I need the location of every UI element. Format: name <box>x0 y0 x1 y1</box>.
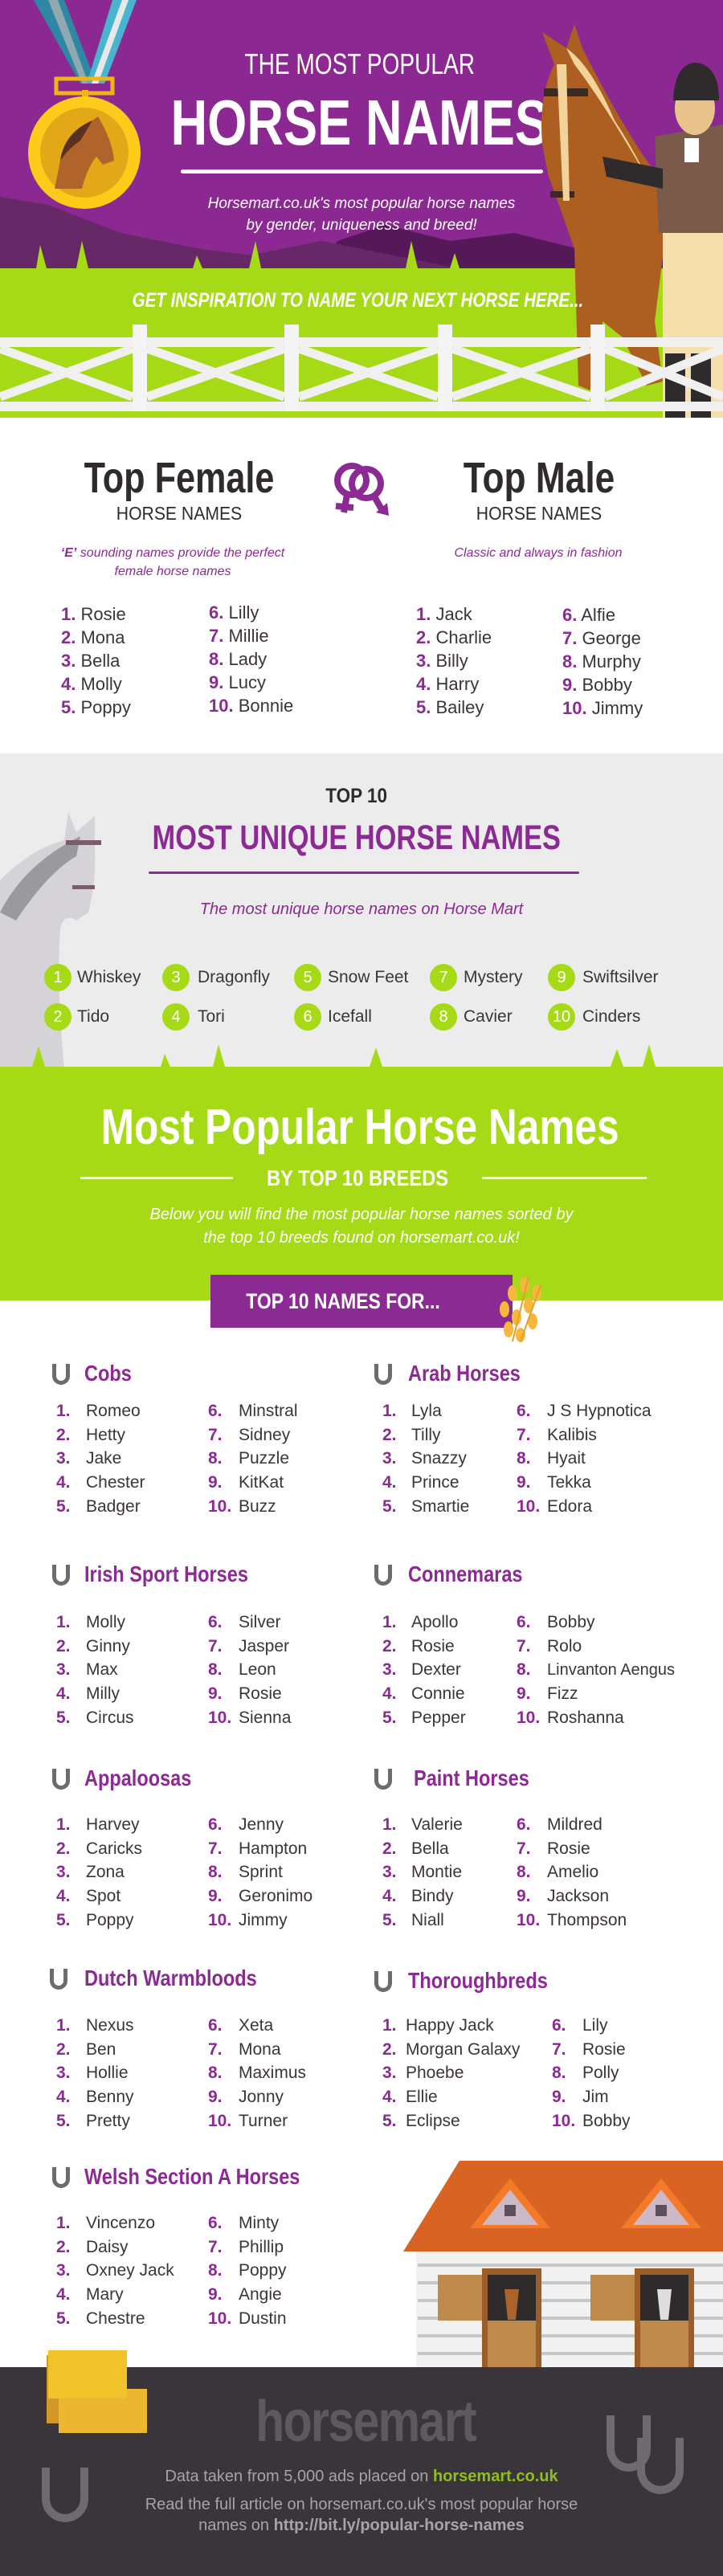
breed: appaloosas: Poppy <box>86 1911 134 1929</box>
footer panel: horsemart <box>255 2390 476 2454</box>
breed: irish sport horses: Circus <box>86 1708 134 1727</box>
breed: dutch warmbloods: Mona <box>239 2040 281 2059</box>
list: unique names: Cavier <box>464 1007 513 1026</box>
breed: irish sport horses: Sienna <box>239 1708 291 1727</box>
title <box>171 47 549 158</box>
list: female names: 5. Poppy <box>61 697 131 717</box>
subheading: by top 10 breeds: BY TOP 10 BREEDS <box>267 1166 448 1190</box>
list: unique names: 8 <box>439 1008 448 1026</box>
title: THE MOST POPULAR <box>245 47 475 80</box>
breed: welsh section a horses: 7. <box>208 2238 223 2256</box>
list: unique names: 5 <box>303 969 312 986</box>
breed: dutch warmbloods: 6. <box>208 2016 223 2035</box>
breed: dutch warmbloods: Ben <box>86 2040 116 2059</box>
list: unique names: 7 <box>439 969 448 986</box>
list: female names: 1. Rosie <box>61 604 126 624</box>
breed: dutch warmbloods: 5. <box>56 2112 71 2130</box>
breed: irish sport horses: 4. <box>56 1684 71 1703</box>
list: female names: 2. Mona <box>61 627 125 647</box>
list: female names: 4. Molly <box>61 674 122 694</box>
breed: irish sport horses: 3. <box>56 1660 71 1679</box>
breed: thoroughbreds: Lily <box>582 2016 608 2035</box>
breed: cobs: Cobs <box>84 1361 132 1386</box>
list: male names: 7. George <box>562 628 641 648</box>
breed: welsh section a horses: 9. <box>208 2285 223 2304</box>
list: male names: 2. Charlie <box>416 627 492 647</box>
list: unique names: Cinders <box>582 1007 640 1026</box>
breed: cobs: 4. <box>56 1473 71 1492</box>
breed: welsh section a horses: 8. <box>208 2261 223 2280</box>
breed: dutch warmbloods: 9. <box>208 2088 223 2106</box>
breed: dutch warmbloods: Turner <box>239 2112 288 2130</box>
list: unique names: Icefall <box>328 1007 372 1026</box>
breed: thoroughbreds: Ellie <box>406 2088 438 2106</box>
breed: paint horses: Jackson <box>547 1887 609 1905</box>
breed: appaloosas: 5. <box>56 1911 71 1929</box>
banner: top 10 names for: TOP 10 NAMES FOR... <box>247 1289 440 1313</box>
list: unique names <box>44 964 659 1031</box>
breed: welsh section a horses: Welsh Section A Horses <box>84 2164 300 2189</box>
icon: wheat <box>500 1277 541 1342</box>
breed: thoroughbreds: Eclipse <box>406 2112 460 2130</box>
list: female names: 9. Lucy <box>209 672 266 692</box>
illustration: horse and rider <box>541 24 723 418</box>
breed: appaloosas: 10. <box>208 1911 231 1929</box>
list: male names: 10. Jimmy <box>562 698 643 718</box>
breed: connemaras: 6. <box>517 1613 531 1631</box>
heading: most popular horse names: Most Popular Horse Names <box>101 1100 619 1155</box>
breed: appaloosas: 7. <box>208 1839 223 1858</box>
breed: irish sport horses: Irish Sport Horses <box>84 1562 248 1586</box>
breed: thoroughbreds: 1. <box>382 2016 397 2035</box>
breed: thoroughbreds: Happy Jack <box>406 2016 494 2035</box>
breed: arab horses: 9. <box>517 1473 531 1492</box>
breed: connemaras: Rosie <box>411 1637 455 1655</box>
breed: connemaras: 8. <box>517 1660 531 1679</box>
breed: cobs: 7. <box>208 1426 223 1444</box>
list: female names: 6. Lilly <box>209 602 259 623</box>
breed: cobs: Minstral <box>239 1402 298 1420</box>
breed: welsh section a horses: Poppy <box>239 2261 287 2280</box>
breed: connemaras: Pepper <box>411 1708 466 1727</box>
breed: irish sport horses: Molly <box>86 1613 125 1631</box>
breed: thoroughbreds: Thoroughbreds <box>408 1968 548 1993</box>
breed: thoroughbreds: Rosie <box>582 2040 626 2059</box>
breed: appaloosas: Jimmy <box>239 1911 288 1929</box>
breed: dutch warmbloods: Nexus <box>86 2016 134 2035</box>
breed: connemaras: 10. <box>517 1708 540 1727</box>
breed: arab horses: 4. <box>382 1473 397 1492</box>
breed: paint horses: Bella <box>411 1839 449 1858</box>
breed: appaloosas: 3. <box>56 1863 71 1881</box>
breed: dutch warmbloods: 1. <box>56 2016 71 2035</box>
female subtitle: female horse names <box>115 565 231 578</box>
subtitle: by gender, uniqueness and breed! <box>246 217 477 234</box>
breed: thoroughbreds <box>374 1968 631 2130</box>
breeds description <box>150 1206 574 1247</box>
heading: top male <box>464 454 615 524</box>
list: female names: 7. Millie <box>209 626 269 646</box>
breed: arab horses: 6. <box>517 1402 531 1420</box>
breed: welsh section a horses <box>52 2164 300 2328</box>
breed: connemaras: 5. <box>382 1708 397 1727</box>
female subtitle: ‘E’ sounding names provide the perfect <box>61 546 284 560</box>
unique subtitle: The most unique horse names on Horse Mart <box>200 900 523 918</box>
breed: paint horses <box>374 1766 627 1929</box>
heading: top 10 unique: MOST UNIQUE HORSE NAMES <box>153 819 561 857</box>
breed: appaloosas <box>52 1766 312 1929</box>
breed: welsh section a horses: 5. <box>56 2309 71 2328</box>
breed: arab horses: 7. <box>517 1426 531 1444</box>
breed: welsh section a horses: 6. <box>208 2214 223 2232</box>
breed: irish sport horses: Ginny <box>86 1637 130 1655</box>
heading: top female: HORSE NAMES <box>116 503 242 524</box>
breed: arab horses: Smartie <box>411 1497 469 1516</box>
subtitle: Horsemart.co.uk's most popular horse names <box>208 195 515 212</box>
breed: thoroughbreds: 6. <box>552 2016 566 2035</box>
breed: irish sport horses: Max <box>86 1660 118 1679</box>
breed: dutch warmbloods: 10. <box>208 2112 231 2130</box>
breed: welsh section a horses: 3. <box>56 2261 71 2280</box>
breed: thoroughbreds: Polly <box>582 2064 619 2082</box>
breed: welsh section a horses: Minty <box>239 2214 279 2232</box>
list: male names: 1. Jack <box>416 604 472 624</box>
breeds description: the top 10 breeds found on horsemart.co.uk! <box>203 1229 520 1247</box>
breed: arab horses: 3. <box>382 1449 397 1468</box>
breed: welsh section a horses: Oxney Jack <box>86 2261 174 2280</box>
list: unique names: Tido <box>77 1007 109 1026</box>
title: HORSE NAMES <box>171 87 549 158</box>
breed: arab horses <box>374 1361 652 1516</box>
fence <box>0 325 723 411</box>
list: unique names: 1 <box>53 969 63 986</box>
panel: breeds intro <box>0 1067 723 1300</box>
list: female names: 3. Bella <box>61 651 120 671</box>
breed: arab horses: Lyla <box>411 1402 442 1420</box>
breed: welsh section a horses: Phillip <box>239 2238 284 2256</box>
breed: appaloosas: 2. <box>56 1839 71 1858</box>
breed: cobs: Badger <box>86 1497 141 1516</box>
breed: welsh section a horses: Vincenzo <box>86 2214 155 2232</box>
subtitle <box>208 195 515 234</box>
breed: irish sport horses: 8. <box>208 1660 223 1679</box>
list: male names: 6. Alfie <box>562 605 615 625</box>
breed: cobs: Jake <box>86 1449 121 1468</box>
breed: paint horses: Montie <box>411 1863 462 1881</box>
breed: connemaras: 1. <box>382 1613 397 1631</box>
breed: thoroughbreds: Bobby <box>582 2112 631 2130</box>
list: unique names: 2 <box>53 1008 63 1026</box>
breed: connemaras: 2. <box>382 1637 397 1655</box>
breed: thoroughbreds: 7. <box>552 2040 566 2059</box>
breed: welsh section a horses: Dustin <box>239 2309 287 2328</box>
list: unique names: Mystery <box>464 968 522 986</box>
breed: connemaras: 7. <box>517 1637 531 1655</box>
breed: dutch warmbloods: Maximus <box>239 2064 306 2082</box>
breed: appaloosas: 4. <box>56 1887 71 1905</box>
breed: paint horses: 4. <box>382 1887 397 1905</box>
breed: dutch warmbloods: 3. <box>56 2064 71 2082</box>
list: unique names: 3 <box>171 969 181 986</box>
breed: arab horses: Edora <box>547 1497 592 1516</box>
breed: arab horses: Kalibis <box>547 1426 597 1444</box>
banner: top 10 names for <box>210 1275 513 1328</box>
heading: top male: HORSE NAMES <box>476 503 602 524</box>
breed: thoroughbreds: Morgan Galaxy <box>406 2040 520 2059</box>
breed: appaloosas: Jenny <box>239 1815 284 1834</box>
breed: appaloosas: Zona <box>86 1863 125 1881</box>
list: male names: 5. Bailey <box>416 697 484 717</box>
breed: dutch warmbloods: Xeta <box>239 2016 273 2035</box>
list: unique names: Whiskey <box>77 968 141 986</box>
breed: irish sport horses: 7. <box>208 1637 223 1655</box>
breed: arab horses: J S Hypnotica <box>547 1402 652 1420</box>
breed: cobs: 5. <box>56 1497 71 1516</box>
breed: thoroughbreds: 4. <box>382 2088 397 2106</box>
list: unique names: Dragonfly <box>198 968 270 986</box>
breed: paint horses: 7. <box>517 1839 531 1858</box>
breed: appaloosas: 8. <box>208 1863 223 1881</box>
breed: connemaras: Fizz <box>547 1684 578 1703</box>
breed: connemaras: Roshanna <box>547 1708 624 1727</box>
list: female names <box>61 602 293 717</box>
breed: welsh section a horses: 2. <box>56 2238 71 2256</box>
breed: connemaras: 3. <box>382 1660 397 1679</box>
breed: connemaras: Rolo <box>547 1637 582 1655</box>
breed: paint horses: Rosie <box>547 1839 590 1858</box>
list: unique names: 10 <box>553 1008 570 1026</box>
breed: connemaras: Connemaras <box>408 1562 522 1586</box>
breed: cobs: 2. <box>56 1426 71 1444</box>
breed: dutch warmbloods: Dutch Warmbloods <box>84 1966 257 1990</box>
list: male names: 3. Billy <box>416 651 468 671</box>
breed: cobs: Romeo <box>86 1402 141 1420</box>
breed: paint horses: Thompson <box>547 1911 627 1929</box>
breed: paint horses: 1. <box>382 1815 397 1834</box>
footer panel: names on http://bit.ly/popular-horse-names <box>198 2517 525 2534</box>
list: unique names: 6 <box>303 1008 312 1026</box>
breed: arab horses: 8. <box>517 1449 531 1468</box>
panel: unique names <box>0 753 723 1067</box>
breed: dutch warmbloods: Jonny <box>239 2088 284 2106</box>
icon: medal <box>28 0 141 209</box>
list: unique names: 4 <box>171 1008 181 1026</box>
breed: welsh section a horses: Angie <box>239 2285 282 2304</box>
breed: appaloosas: Caricks <box>86 1839 142 1858</box>
header panel <box>0 0 723 418</box>
heading: top 10 unique <box>153 785 561 857</box>
breed: cobs: 9. <box>208 1473 223 1492</box>
breed: cobs: Chester <box>86 1473 145 1492</box>
breed: dutch warmbloods: 7. <box>208 2040 223 2059</box>
breed: welsh section a horses: 4. <box>56 2285 71 2304</box>
breed: paint horses: 5. <box>382 1911 397 1929</box>
breed: paint horses: 6. <box>517 1815 531 1834</box>
breed: paint horses: Amelio <box>547 1863 598 1881</box>
breed: cobs: Sidney <box>239 1426 290 1444</box>
breed: irish sport horses: 10. <box>208 1708 231 1727</box>
title underline <box>181 169 543 174</box>
breed: cobs: 3. <box>56 1449 71 1468</box>
heading: top 10 unique: TOP 10 <box>326 785 387 807</box>
breed: welsh section a horses: Mary <box>86 2285 124 2304</box>
breed: dutch warmbloods: Benny <box>86 2088 134 2106</box>
breed: connemaras: Bobby <box>547 1613 595 1631</box>
list: male names: 4. Harry <box>416 674 479 694</box>
breed: cobs: 8. <box>208 1449 223 1468</box>
breed: welsh section a horses: 10. <box>208 2309 231 2328</box>
breed: paint horses: Bindy <box>411 1887 454 1905</box>
breed: cobs: 10. <box>208 1497 231 1516</box>
breed: dutch warmbloods: Pretty <box>86 2112 130 2130</box>
list: unique names: Swiftsilver <box>582 968 659 986</box>
breed: cobs: Puzzle <box>239 1449 289 1468</box>
breed: arab horses: 10. <box>517 1497 540 1516</box>
list: unique names: Tori <box>198 1007 225 1026</box>
breed: cobs: Buzz <box>239 1497 276 1516</box>
breed: connemaras: Apollo <box>411 1613 458 1631</box>
footer panel: Data taken from 5,000 ads placed on horsemart.co.uk <box>165 2468 558 2485</box>
breed: arab horses: 1. <box>382 1402 397 1420</box>
breed: dutch warmbloods: Hollie <box>86 2064 129 2082</box>
breed: cobs: KitKat <box>239 1473 284 1492</box>
breed: paint horses: Niall <box>411 1911 444 1929</box>
breed: connemaras: Linvanton Aengus <box>547 1661 675 1679</box>
breed: arab horses: Snazzy <box>411 1449 467 1468</box>
breed: paint horses: 3. <box>382 1863 397 1881</box>
male subtitle: Classic and always in fashion <box>455 546 622 560</box>
heading: top female: Top Female <box>84 454 274 502</box>
breed: irish sport horses: Jasper <box>239 1637 289 1655</box>
heading: top female <box>84 454 274 524</box>
breed: irish sport horses: 1. <box>56 1613 71 1631</box>
breed: irish sport horses: 9. <box>208 1684 223 1703</box>
breed: dutch warmbloods: 4. <box>56 2088 71 2106</box>
breed: appaloosas: Hampton <box>239 1839 307 1858</box>
breeds description: Below you will find the most popular horse names sorted by <box>150 1206 573 1223</box>
breed: arab horses: Hyait <box>547 1449 586 1468</box>
breed: cobs <box>52 1361 298 1516</box>
breed: paint horses: Paint Horses <box>414 1766 529 1790</box>
breed: connemaras: Connie <box>411 1684 465 1703</box>
breed: irish sport horses: Milly <box>86 1684 120 1703</box>
list: unique names: Snow Feet <box>328 968 408 986</box>
breed: thoroughbreds: 2. <box>382 2040 397 2059</box>
breed: thoroughbreds: 8. <box>552 2064 566 2082</box>
breed: arab horses: 2. <box>382 1426 397 1444</box>
breed: paint horses: 10. <box>517 1911 540 1929</box>
breed: thoroughbreds: 5. <box>382 2112 397 2130</box>
heading: top male: Top Male <box>464 454 615 502</box>
breed: paint horses: 8. <box>517 1863 531 1881</box>
breed: paint horses: Valerie <box>411 1815 463 1834</box>
breed: irish sport horses <box>52 1562 291 1727</box>
breed: irish sport horses: 2. <box>56 1637 71 1655</box>
list: male names <box>416 604 643 718</box>
icon: gender symbols <box>334 463 389 516</box>
breed: thoroughbreds: 3. <box>382 2064 397 2082</box>
breed: irish sport horses: Silver <box>239 1613 281 1631</box>
list: unique names: 9 <box>557 969 566 986</box>
breed: thoroughbreds: 10. <box>552 2112 575 2130</box>
breed: dutch warmbloods: 2. <box>56 2040 71 2059</box>
breed: welsh section a horses: 1. <box>56 2214 71 2232</box>
subheading: by top 10 breeds <box>80 1166 647 1190</box>
list: female names: 10. Bonnie <box>209 696 293 716</box>
breed: arab horses: 5. <box>382 1497 397 1516</box>
breed: paint horses: Mildred <box>547 1815 602 1834</box>
breed: arab horses: Tilly <box>411 1426 441 1444</box>
breed: appaloosas: Spot <box>86 1887 120 1905</box>
breed: cobs: 1. <box>56 1402 71 1420</box>
breed: welsh section a horses: Daisy <box>86 2238 129 2256</box>
breed: welsh section a horses: Chestre <box>86 2309 145 2328</box>
breed: arab horses: Prince <box>411 1473 460 1492</box>
breed: connemaras: 9. <box>517 1684 531 1703</box>
breed: irish sport horses: Rosie <box>239 1684 282 1703</box>
breed: appaloosas: Appaloosas <box>84 1766 191 1790</box>
breed: paint horses: 9. <box>517 1887 531 1905</box>
breed: appaloosas: 9. <box>208 1887 223 1905</box>
breed: irish sport horses: Leon <box>239 1660 276 1679</box>
breed: dutch warmbloods: 8. <box>208 2064 223 2082</box>
breed: dutch warmbloods <box>50 1966 306 2130</box>
breed: appaloosas: 6. <box>208 1815 223 1834</box>
breed: connemaras: 4. <box>382 1684 397 1703</box>
breed: cobs: 6. <box>208 1402 223 1420</box>
list: female names: 8. Lady <box>209 649 267 669</box>
female subtitle <box>61 546 285 578</box>
footer panel <box>0 2367 723 2576</box>
list: male names: 9. Bobby <box>562 675 632 695</box>
breed: arab horses: Tekka <box>547 1473 591 1492</box>
breed: cobs: Hetty <box>86 1426 125 1444</box>
footer panel: Read the full article on horsemart.co.uk's most popular horse <box>145 2496 578 2513</box>
breed: appaloosas: Harvey <box>86 1815 140 1834</box>
illustration: stable <box>403 2161 723 2367</box>
breed: appaloosas: Geronimo <box>239 1887 312 1905</box>
breed: thoroughbreds: Jim <box>582 2088 609 2106</box>
breed: connemaras: Dexter <box>411 1660 461 1679</box>
breed: paint horses: 2. <box>382 1839 397 1858</box>
breed: arab horses: Arab Horses <box>408 1361 521 1386</box>
list: male names: 8. Murphy <box>562 651 641 672</box>
breed: thoroughbreds: Phoebe <box>406 2064 464 2082</box>
tagline: GET INSPIRATION TO NAME YOUR NEXT HORSE HERE... <box>132 289 583 312</box>
breed: appaloosas: Sprint <box>239 1863 283 1881</box>
breed: connemaras <box>374 1562 675 1727</box>
breed: irish sport horses: 5. <box>56 1708 71 1727</box>
breed: irish sport horses: 6. <box>208 1613 223 1631</box>
breed: thoroughbreds: 9. <box>552 2088 566 2106</box>
breed: appaloosas: 1. <box>56 1815 71 1834</box>
